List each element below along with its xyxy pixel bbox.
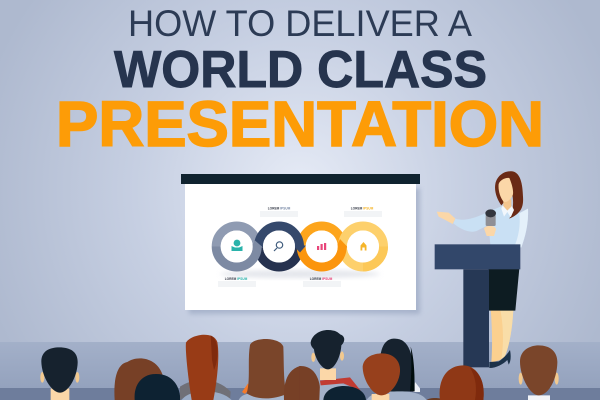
microphone <box>485 209 496 226</box>
projection screen <box>181 174 420 314</box>
label: top second ring <box>260 206 298 216</box>
presenter face <box>499 178 513 202</box>
audience member 5 <box>239 339 293 400</box>
audience member 7 <box>311 330 361 400</box>
audience member 6 right part <box>299 366 321 400</box>
audience <box>40 330 559 400</box>
icon: bar chart <box>317 243 326 250</box>
presenter blouse <box>453 206 528 247</box>
label: top fourth ring: LOREM IPSUM <box>351 206 374 210</box>
audience member 3 <box>135 374 180 400</box>
audience member 4 <box>180 335 232 400</box>
presenter pointing hand <box>437 212 455 224</box>
presenter holding hand <box>484 226 496 236</box>
audience member 9 <box>363 339 427 400</box>
audience member 11 <box>440 365 484 400</box>
stage floor <box>0 342 600 388</box>
label: bottom first ring: LOREM IPSUM <box>225 277 248 281</box>
label: top fourth ring <box>344 206 382 216</box>
presenter leg shade <box>500 308 513 359</box>
title line 3: PRESENTATION <box>56 88 544 160</box>
presenter legs <box>491 308 513 363</box>
title line 2: WORLD CLASS <box>114 41 487 99</box>
title line 1: HOW TO DELIVER A <box>128 3 472 44</box>
presenter hair back <box>495 171 523 219</box>
ring diagram <box>216 226 384 278</box>
ring 4 <box>342 226 384 267</box>
ring 2 lower half <box>258 246 300 267</box>
label: bottom first ring <box>218 277 256 286</box>
title <box>56 3 544 160</box>
audience member 6 <box>284 366 300 400</box>
ring centres <box>221 230 379 262</box>
podium column <box>463 269 489 367</box>
icon: person <box>232 240 242 251</box>
ring 3 lower half with arrow <box>301 239 348 267</box>
ring 1 lower half with arrow <box>216 240 263 267</box>
presenter blouse highlight <box>514 209 528 247</box>
audience member 10 <box>427 398 444 400</box>
presenter shoes <box>489 350 511 368</box>
icon: magnifier <box>274 242 283 251</box>
audience member 1 <box>40 347 79 400</box>
audience member 12 <box>519 345 559 400</box>
screen top bar <box>181 174 420 184</box>
ring 3 upper half <box>301 226 342 246</box>
audience member 8 <box>323 386 366 400</box>
label: bottom third ring <box>303 277 341 286</box>
ring shadow <box>220 270 380 278</box>
ring 2 upper half with arrow <box>258 226 306 252</box>
screen panel <box>185 184 416 310</box>
presenter collar <box>501 205 514 217</box>
ring 1 upper half <box>216 226 257 246</box>
screen shadow <box>189 188 420 314</box>
label: bottom third ring: LOREM IPSUM <box>310 277 333 281</box>
label: top second ring: LOREM IPSUM <box>268 206 291 210</box>
presenter with podium <box>435 171 528 368</box>
icon: house <box>361 242 366 250</box>
presenter neck <box>503 199 511 211</box>
front floor band <box>0 388 600 400</box>
podium top <box>435 244 520 269</box>
audience member 2 <box>114 358 163 400</box>
presenter skirt <box>488 268 519 311</box>
